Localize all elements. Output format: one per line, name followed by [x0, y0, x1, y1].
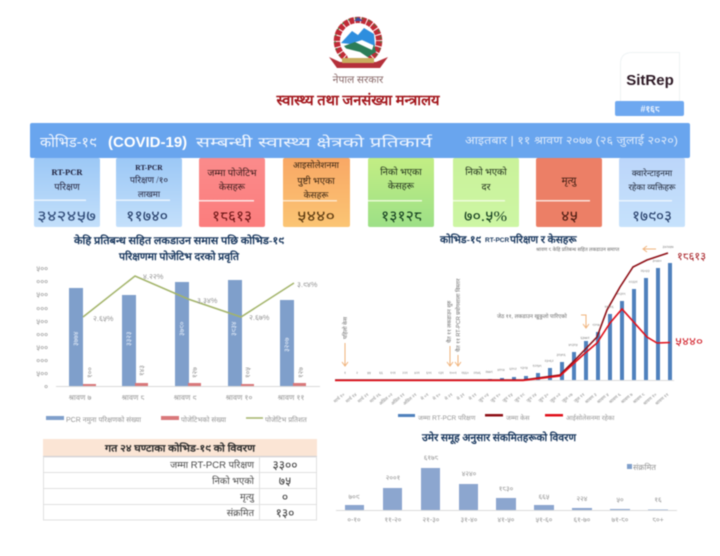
chart: cumulative tests, cases and isolation: ९३१: [438, 371, 444, 375]
annotation: lockdown start: [446, 300, 453, 366]
chart: cumulative tests, cases and isolation: ३४२४५७: [663, 245, 674, 249]
chart: infected by age group: ६१७८: [424, 455, 439, 462]
ministry heading: स्वास्थ्य तथा जनसंख्या मन्त्रालय: [275, 92, 440, 109]
heading: age group chart: उमेर समूह अनुसार संकमितहरूको विवरण: [421, 431, 576, 445]
stat card: people in quarantine: १७९०३: [632, 209, 672, 225]
chart: cumulative tests, cases and isolation: [332, 245, 674, 406]
chart: cumulative tests, cases and isolation: ९२८७: [592, 323, 600, 327]
SitRep badge: SitRep: [626, 72, 674, 89]
SitRep badge: [615, 52, 684, 116]
chart: cumulative tests, cases and isolation: जुल ०७: [561, 392, 575, 404]
chart: PCR tests, positives and positivity rate: ०००: [36, 304, 48, 313]
legend: age group chart: संक्रमित: [633, 462, 656, 472]
chart: PCR tests, positives and positivity rate: १४३: [139, 365, 146, 376]
heading: RT-PCR tests and cases chart: RT-PCR: [485, 237, 510, 244]
chart: cumulative tests, cases and isolation: श्रावण ७: [620, 392, 634, 405]
stat card: recovery rate: ७०.५%: [464, 209, 507, 225]
legend: positivity chart: PCR नमुना परिक्षणको संख्या: [66, 415, 141, 424]
stat card: RT-PCR per million: RT-PCR: [135, 163, 163, 172]
heading: RT-PCR tests and cases chart: परिक्षण र केसहरू: [509, 233, 577, 246]
chart: PCR tests, positives and positivity rate: ३३२३: [126, 331, 133, 346]
chart: PCR tests, positives and positivity rate: ०: [44, 382, 48, 391]
stat card: recovered cases: केसहरू: [388, 180, 415, 192]
chart: cumulative tests, cases and isolation: श्रावण ११: [654, 392, 670, 406]
legend: positivity chart: पोजेटिभको संख्या: [181, 415, 226, 424]
heading: positivity trend chart: केहि प्रतिबन्ध सहित लकडाउन समास पछि कोभिड-१९: [73, 234, 285, 247]
chart: PCR tests, positives and positivity rate: ५००: [36, 290, 48, 299]
stat card: confirmed in isolation: ५४४०: [297, 209, 335, 225]
legend: tests and cases chart: [398, 414, 615, 422]
chart: PCR tests, positives and positivity rate: ५००: [36, 369, 48, 378]
stat card: deaths: मृत्यु: [562, 176, 577, 187]
chart: cumulative tests, cases and isolation: ८३९५: [520, 366, 528, 370]
chart: cumulative tests, cases and isolation: अप्रिल २१: [401, 391, 418, 406]
stat card: deaths: ४५: [561, 209, 578, 225]
chart: PCR tests, positives and positivity rate: ५००: [36, 343, 48, 352]
chart: PCR tests, positives and positivity rate: ३२०७: [284, 337, 291, 352]
chart: cumulative tests, cases and isolation: जुन १५: [501, 392, 515, 404]
chart: cumulative tests, cases and isolation: मार्च २६: [368, 391, 382, 404]
table: last 24 hours details: संक्रमित: [227, 507, 255, 519]
chart: PCR tests, positives and positivity rate: ३.३४%: [197, 296, 218, 305]
chart: infected by age group: २२४: [577, 496, 588, 503]
chart: PCR tests, positives and positivity rate: ०००: [36, 330, 48, 339]
chart: infected by age group: १८३०: [499, 486, 514, 493]
stat card: RT-PCR tests: RT-PCR: [51, 167, 83, 177]
stat card: people in quarantine: रहेका व्यक्तिहरू: [628, 182, 676, 192]
heading: RT-PCR tests and cases chart: कोभिड-१९: [439, 233, 481, 246]
stat card: RT-PCR per million: [116, 158, 182, 227]
stat card: recovered cases: १३१२८: [381, 209, 422, 225]
chart: infected by age group: २१-३०: [423, 517, 440, 524]
chart: cumulative tests, cases and isolation: जुन २४: [525, 392, 539, 404]
chart: cumulative tests, cases and isolation: मे २१: [443, 391, 454, 401]
chart: PCR tests, positives and positivity rate: ३७७४: [73, 331, 80, 346]
chart: PCR tests, positives and positivity rate: ३९३४: [231, 321, 238, 336]
table: last 24 hours details: १३०: [276, 506, 294, 520]
callout: isolation value: ५४४०: [675, 336, 703, 348]
chart: infected by age group: ६६५: [539, 494, 550, 501]
emblem: Nepal government coat of arms: [329, 17, 388, 68]
chart: PCR tests, positives and positivity rate: २.६७%: [249, 313, 270, 322]
annotation: lockdown loosened: जेठ ११, लकडाउन खुकुलो पारिएको: [497, 313, 567, 320]
stat card: recovery rate: निको भएको: [465, 166, 507, 178]
chart: PCR tests, positives and positivity rate: श्रावण ८: [122, 393, 145, 402]
heading: RT-PCR tests and cases chart: [439, 233, 577, 246]
chart: cumulative tests, cases and isolation: २: [356, 371, 358, 375]
stat card: confirmed in isolation: केसहरू: [304, 189, 329, 200]
stat card: RT-PCR per million: लाखमा: [138, 189, 161, 199]
panel: report banner: [30, 123, 690, 158]
ministry heading: नेपाल सरकार: [333, 73, 384, 86]
chart: cumulative tests, cases and isolation: ११९८६: [604, 305, 614, 309]
chart: cumulative tests, cases and isolation: मार्च २१: [356, 391, 370, 404]
chart: cumulative tests, cases and isolation: मे ०१: [419, 391, 430, 401]
stat card: confirmed in isolation: [283, 158, 350, 227]
stat card: total positive cases: केसहरू: [219, 181, 246, 193]
stat card: RT-PCR tests: [34, 158, 100, 227]
chart: cumulative tests, cases and isolation: अप्रिल ११: [389, 391, 406, 406]
chart: PCR tests, positives and positivity rate: ४.२२%: [143, 272, 164, 281]
heading: positivity trend chart: परिक्षणमा पोजेटिभ दरको प्रवृति: [118, 250, 240, 264]
legend: tests and cases chart: जम्मा RT-PCR परिक्षण: [418, 414, 476, 422]
panel: report banner: आइतबार | ११ श्रावण २०७७ (२६ जुलाई २०२०): [465, 134, 678, 147]
stat card: recovered cases: [368, 158, 434, 227]
chart: cumulative tests, cases and isolation: जुन १९: [513, 392, 527, 404]
chart: infected by age group: [336, 455, 677, 524]
chart: infected by age group: ७०९: [349, 494, 360, 501]
stat card: RT-PCR per million: परिक्षण /१०: [130, 174, 168, 185]
chart: infected by age group: ८०+: [652, 517, 664, 524]
chart: cumulative tests, cases and isolation: ६३७४१: [580, 336, 590, 340]
annotation: lockdown start: चैत ११ लकडाउन शुरु: [446, 300, 453, 343]
stat card: RT-PCR tests: परिक्षण: [54, 181, 80, 193]
chart: infected by age group: ३१-४०: [461, 517, 478, 524]
chart: cumulative tests, cases and isolation: जुल ०२: [549, 392, 562, 404]
chart: cumulative tests, cases and isolation: ५५: [367, 371, 371, 375]
stat card: confirmed in isolation: आइसोलेशनमा: [293, 160, 340, 170]
chart: cumulative tests, cases and isolation: ६६: [379, 371, 383, 375]
chart: infected by age group: २००१: [386, 475, 400, 482]
chart: PCR tests, positives and positivity rate: श्रावण ९: [174, 393, 197, 402]
table: last 24 hours details: [43, 439, 317, 520]
chart: infected by age group: ६१-७०: [574, 517, 591, 524]
stat card: people in quarantine: [619, 158, 685, 227]
chart: infected by age group: १६: [654, 497, 662, 504]
chart: cumulative tests, cases and isolation: १: [344, 371, 346, 375]
chart: cumulative tests, cases and isolation: मे १०: [431, 391, 442, 401]
annotation: lockdown ended: [536, 246, 656, 253]
chart: cumulative tests, cases and isolation: १००१: [449, 371, 457, 375]
panel: report banner: कोभिड-१९: [40, 134, 97, 151]
legend: tests and cases chart: जम्मा केस: [506, 414, 530, 422]
chart: PCR tests, positives and positivity rate: श्रावण ७: [69, 393, 92, 402]
panel: report banner: सम्बन्धी स्वास्थ्य क्षेत्रको प्रतिकार्य: [196, 134, 433, 150]
chart: cumulative tests, cases and isolation: जुन १०: [489, 392, 503, 404]
chart: cumulative tests, cases and isolation: १२१५८: [532, 364, 542, 368]
stat card: total positive cases: [199, 158, 265, 227]
chart: cumulative tests, cases and isolation: ६८८: [426, 371, 432, 375]
chart: cumulative tests, cases and isolation: ४१८४: [497, 368, 505, 372]
chart: infected by age group: ७१-८०: [612, 517, 629, 524]
annotation: lockdown loosened: [497, 313, 589, 328]
legend: positivity chart: पोजेटिभ प्रतिशत: [265, 415, 308, 424]
chart: PCR tests, positives and positivity rate: १००: [87, 367, 94, 378]
chart: PCR tests, positives and positivity rate: ५००: [36, 264, 48, 273]
table: last 24 hours details: जम्मा RT-PCR परिक्षण: [170, 459, 254, 471]
panel: report banner: (COVID-19): [108, 134, 187, 151]
chart: PCR tests, positives and positivity rate: श्रावण १०: [226, 393, 252, 402]
chart: infected by age group: ४२४०: [462, 471, 477, 478]
chart: cumulative tests, cases and isolation: २२३३१: [628, 280, 638, 284]
chart: cumulative tests, cases and isolation: जुन ०५: [477, 392, 491, 404]
annotation: RT-PCR start in Nepal: चैत ११ RT-PCR प्रयोगशाला विस्तार: [455, 278, 462, 352]
chart: cumulative tests, cases and isolation: १८३१८: [616, 292, 626, 296]
chart: cumulative tests, cases and isolation: श्रावण ८: [632, 392, 646, 405]
legend: positivity chart: [46, 415, 308, 424]
callout: total cases value: १८६१३: [677, 251, 706, 263]
table: last 24 hours details: मृत्यु: [240, 492, 255, 503]
chart: PCR tests, positives and positivity rate: ०००: [36, 356, 48, 365]
stat card: confirmed in isolation: पुष्टी भएका: [297, 175, 335, 187]
chart: infected by age group: ५१-६०: [536, 517, 553, 524]
chart: cumulative tests, cases and isolation: ३०४४०: [652, 259, 662, 263]
annotation: first case: पहिलो केस: [342, 317, 349, 339]
stat card: RT-PCR tests: ३४२४५७: [37, 209, 96, 225]
stat card: recovery rate: [453, 158, 519, 227]
stat card: total positive cases: जम्मा पोजेटिभ: [207, 167, 257, 179]
table: last 24 hours details: ०: [282, 490, 288, 504]
stat card: deaths: [536, 158, 602, 227]
chart: PCR tests, positives and positivity rate: १०५: [245, 367, 252, 378]
stat card: total positive cases: १८६१३: [212, 209, 252, 225]
chart: cumulative tests, cases and isolation: २७४९: [485, 370, 493, 374]
heading: positivity trend chart: [73, 234, 285, 264]
chart: cumulative tests, cases and isolation: श्रावण ६: [608, 392, 622, 405]
chart: cumulative tests, cases and isolation: श्रावण ५: [596, 392, 610, 405]
annotation: lockdown ended: श्रावण ८ केहि प्रतिबन्ध सहित लकडाउन समाप्त: [536, 246, 619, 253]
chart: cumulative tests, cases and isolation: २३०६२: [544, 359, 554, 363]
chart: cumulative tests, cases and isolation: श्रावण ३: [584, 392, 598, 405]
table: last 24 hours details: ३३००: [273, 458, 297, 472]
SitRep badge: #१६८: [640, 104, 660, 114]
chart: cumulative tests, cases and isolation: श्रावण १०: [642, 392, 658, 406]
ministry heading: [275, 73, 440, 109]
stat card: recovery rate: दर: [482, 183, 492, 193]
chart: cumulative tests, cases and isolation: मे ११: [467, 391, 478, 401]
chart: infected by age group: ११-२०: [385, 517, 402, 524]
stat card: people in quarantine: क्वारेन्टाइनमा: [632, 168, 673, 178]
chart: PCR tests, positives and positivity rate: १२७: [192, 367, 199, 378]
chart: cumulative tests, cases and isolation: ४२१: [414, 371, 420, 375]
chart: cumulative tests, cases and isolation: मार्च १४: [344, 391, 358, 404]
chart: cumulative tests, cases and isolation: जुन ३०: [537, 392, 551, 404]
stat card: recovered cases: निको भएका: [380, 166, 422, 178]
chart: cumulative tests, cases and isolation: २६०३३: [640, 269, 650, 273]
chart: cumulative tests, cases and isolation: ४८३१५: [568, 343, 578, 347]
chart: cumulative tests, cases and isolation: ३१५८६: [556, 353, 566, 357]
chart: cumulative tests, cases and isolation: १६६०: [461, 371, 469, 375]
chart: cumulative tests, cases and isolation: १९१: [390, 371, 396, 375]
chart: PCR tests, positives and positivity rate: [36, 264, 320, 402]
chart: PCR tests, positives and positivity rate: ३७९०: [179, 321, 186, 336]
chart: infected by age group: ४१-५०: [498, 517, 515, 524]
chart: PCR tests, positives and positivity rate: १२७: [298, 367, 305, 378]
stat card: RT-PCR per million: ११७४०: [126, 209, 168, 225]
chart: PCR tests, positives and positivity rate: ३.९४%: [297, 280, 318, 289]
legend: tests and cases chart: आईसोलेसनमा रहेका: [566, 414, 615, 422]
chart: cumulative tests, cases and isolation: जुल ११: [573, 392, 586, 404]
chart: PCR tests, positives and positivity rate: २.६५%: [93, 314, 114, 323]
chart: cumulative tests, cases and isolation: अप्रिल ०२: [377, 391, 394, 406]
chart: PCR tests, positives and positivity rate: श्रावण ११: [278, 393, 304, 402]
chart: cumulative tests, cases and isolation: २१४६: [473, 371, 481, 375]
chart: cumulative tests, cases and isolation: मे ३१: [455, 391, 466, 401]
chart: PCR tests, positives and positivity rate: ०००: [36, 277, 48, 286]
chart: PCR tests, positives and positivity rate: ५००: [36, 317, 48, 326]
chart: cumulative tests, cases and isolation: ६१८२: [509, 367, 517, 371]
table: last 24 hours details: गत २४ घण्टाका कोभिड-१९ को विवरण: [104, 442, 256, 454]
table: last 24 hours details: निको भएको: [212, 475, 255, 487]
chart: infected by age group: ५०: [616, 497, 624, 504]
annotation: first case: [342, 317, 349, 366]
chart: cumulative tests, cases and isolation: मार्च १०: [332, 391, 346, 404]
table: last 24 hours details: ७५: [279, 474, 291, 488]
chart: infected by age group: ०-१०: [347, 517, 361, 524]
chart: cumulative tests, cases and isolation: २२१: [402, 371, 408, 375]
